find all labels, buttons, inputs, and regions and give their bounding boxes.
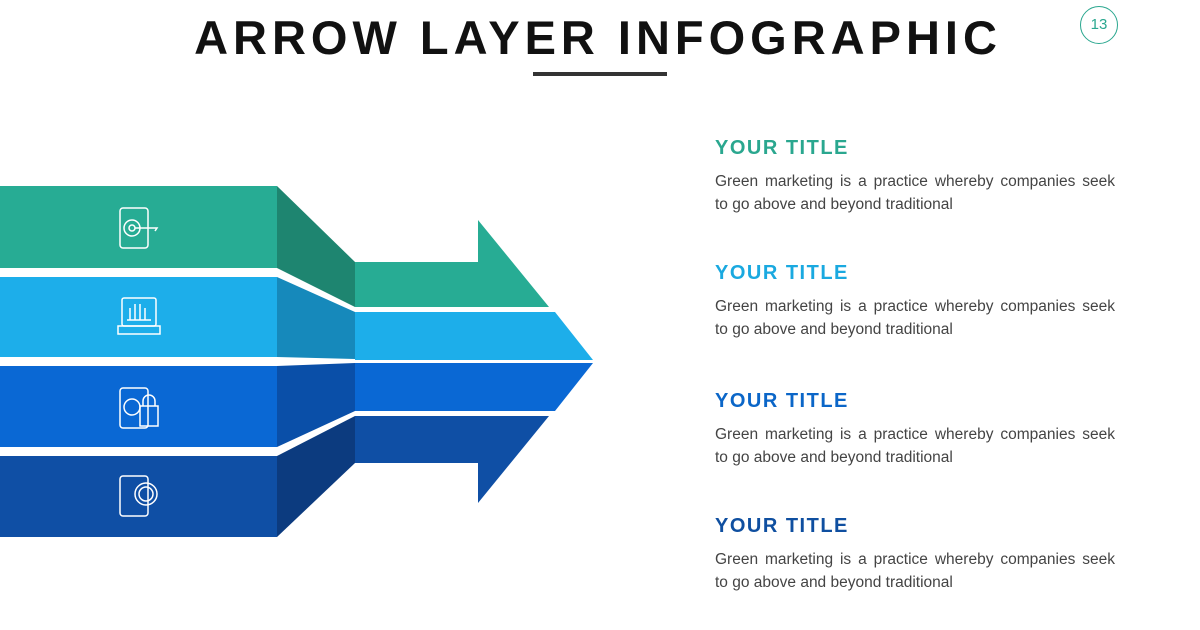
text block 4 xyxy=(715,515,1115,591)
text block 4: YOUR TITLE xyxy=(715,515,849,537)
text block 4: Green marketing is a practice whereby companies seek xyxy=(715,551,1115,568)
icon: laptop chart xyxy=(118,298,160,334)
text block 1: Green marketing is a practice whereby companies seek xyxy=(715,173,1115,190)
icon: phone key xyxy=(120,208,157,248)
layer 2 light blue xyxy=(0,277,593,360)
layer 3 blue xyxy=(0,363,593,447)
text block 3: YOUR TITLE xyxy=(715,390,849,412)
text block 3: Green marketing is a practice whereby companies seek xyxy=(715,426,1115,443)
page number xyxy=(1080,6,1118,44)
text block 1: to go above and beyond traditional xyxy=(715,196,953,213)
arrow diagram xyxy=(0,186,593,537)
text block 4: to go above and beyond traditional xyxy=(715,574,953,591)
text block 1: YOUR TITLE xyxy=(715,137,849,159)
layer 1 teal xyxy=(0,186,549,307)
text block 2: Green marketing is a practice whereby companies seek xyxy=(715,298,1115,315)
text block 2: to go above and beyond traditional xyxy=(715,321,953,338)
icon: phone coin xyxy=(120,476,157,516)
text block 2: YOUR TITLE xyxy=(715,262,849,284)
icon: phone dollar lock xyxy=(120,388,158,428)
text block 2 xyxy=(715,262,1115,338)
page number: 13 xyxy=(1091,16,1107,33)
title underline xyxy=(533,72,667,76)
text block 3: to go above and beyond traditional xyxy=(715,449,953,466)
text block 1 xyxy=(715,137,1115,213)
text block 3 xyxy=(715,390,1115,466)
title: ARROW LAYER INFOGRAPHIC xyxy=(194,11,1002,64)
layer 4 dark blue xyxy=(0,416,549,537)
